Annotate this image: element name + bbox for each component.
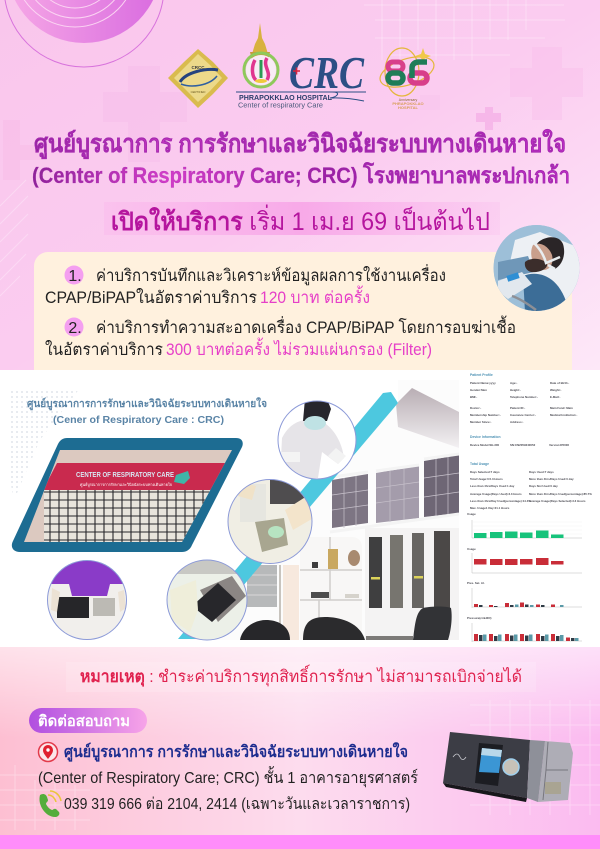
report text: Total Usage xyxy=(470,462,489,466)
collage heading: (Cener of Respiratory Care : CRC) xyxy=(53,415,224,426)
report text: Telephone Number:- xyxy=(510,395,538,399)
chairs xyxy=(303,617,365,640)
logo: 86th anniversary xyxy=(376,48,438,110)
report text: More than 4hrs/Days Used:0 day xyxy=(529,477,574,481)
logo: CRCC gold badge: CERTIFIED xyxy=(191,90,205,94)
contact heading pill: ติดต่อสอบถาม xyxy=(38,712,130,730)
report text: Device Information xyxy=(470,435,501,439)
report text xyxy=(467,373,592,620)
photo: purple gown with device xyxy=(47,560,129,640)
report text: Member Since:- xyxy=(470,420,492,424)
note xyxy=(66,662,536,692)
report text: Medical Institution:- xyxy=(550,413,577,417)
report text: Doctor:- xyxy=(470,406,481,410)
photo: patient with CPAP mask xyxy=(494,225,585,312)
item 1 text: CPAP/BiPAPในอัตราค่าบริการ xyxy=(45,288,257,307)
windows xyxy=(330,454,459,532)
report text: Days Used:7 days xyxy=(529,470,554,474)
report text: Max. Usage1 Day:21.1 Hours xyxy=(470,506,510,510)
photo: hand holding device xyxy=(167,560,247,640)
background medical crosses and grid xyxy=(0,0,583,296)
report text: Patient ID:- xyxy=(510,406,525,410)
logo: CRC wordmark: PHRAPOKKLAO HOSPITAL xyxy=(239,93,332,102)
logo row xyxy=(168,23,438,110)
note: หมายเหตุ : ชำระค่าบริการทุกสิทธิ์การรักษา ไม่สามารถเบิกจ่ายได้ xyxy=(80,664,522,687)
report text: Gender:Men xyxy=(470,388,487,392)
photo: gloved hands cleaning xyxy=(228,480,317,564)
report text: Insurance Carrier:- xyxy=(510,413,536,417)
chart: pressure settings bars xyxy=(472,588,582,608)
report text: Days Not Used:0 day xyxy=(529,484,558,488)
report text: Days Selected:7 days xyxy=(470,470,500,474)
report text: Pressure(cmH2O) xyxy=(467,616,491,620)
opening date banner: เปิดให้บริการ เริ่ม 1 เม.ย 69 เป็นต้นไป xyxy=(111,204,490,236)
contact: center name: ศูนย์บูรณาการ การรักษาและวินิจฉัยระบบทางเดินหายใจ xyxy=(64,742,408,763)
report text: Usage xyxy=(467,512,476,516)
report: CPAP usage data xyxy=(467,373,592,642)
logo: 86th anniversary: HOSPITAL xyxy=(398,105,419,110)
title xyxy=(32,128,570,188)
icon: phone xyxy=(39,791,61,817)
report text: Usage xyxy=(467,547,476,551)
logo: CRCC gold badge: CRCC xyxy=(192,65,205,70)
report text: Device Model:SE-300 xyxy=(470,443,499,447)
item 1 number xyxy=(64,266,84,285)
contact: phone number: 039 319 666 ต่อ 2104, 2414 (เฉพาะวันและเวลาราชการ) xyxy=(64,796,410,813)
logo: CRC wordmark: Center of respiratory Care xyxy=(238,100,323,110)
chart: pressure bars xyxy=(472,623,582,642)
photo: service center storefront: ศูนย์บูรณาการการรักษาและวินิจฉัยระบบทางเดินหายใจ xyxy=(80,482,172,488)
side window xyxy=(247,565,277,607)
contact: address: (Center of Respiratory Care; CRC) ชั้น 1 อาคารอายุรศาสตร์ xyxy=(38,766,418,788)
logo: 86th anniversary: PHRAPOKKLAO xyxy=(392,101,424,106)
logo: hospital royal emblem xyxy=(244,23,278,87)
photo: nurse with device xyxy=(277,399,357,480)
panel: service fees xyxy=(34,252,572,370)
item 2 text: ค่าบริการทำความสะอาดเครื่อง CPAP/BiPAP โดยการอบฆ่าเชื้อ xyxy=(96,315,516,337)
item 2 text xyxy=(45,315,516,359)
report text: Pres. Set. Al. xyxy=(467,581,485,585)
logo: CRCC gold badge xyxy=(168,49,228,108)
report text: Total Usage:0.5.3 Hours xyxy=(470,477,503,481)
icon: location pin xyxy=(38,742,58,762)
item 2 number: 2. xyxy=(68,320,82,337)
collage heading: ศูนย์บูรณาการการรักษาและวินิจฉัยระบบทางเดินหายใจ xyxy=(27,396,267,411)
photo: service center storefront xyxy=(12,438,243,552)
report text: SN:CN2059240052 xyxy=(510,443,536,447)
photo: service center storefront: CENTER OF RESPIRATORY CARE xyxy=(76,472,174,479)
report text: Average Usage(Days Used):3.3 Hours xyxy=(470,492,522,496)
logo: 86th anniversary: Anniversary xyxy=(399,98,417,102)
report text: Less than 4hrs/Days Used:1 day xyxy=(470,484,515,488)
report text: Weight:- xyxy=(550,388,562,392)
cabinet xyxy=(365,528,459,640)
report text: Age:- xyxy=(510,381,517,385)
chart: usage red bars xyxy=(472,553,582,573)
report text: Address:- xyxy=(510,420,524,424)
bottom strip xyxy=(0,835,600,849)
report text: Patient Name:yyyy xyxy=(470,381,496,385)
item 1 number: 1. xyxy=(68,268,82,285)
contact heading pill xyxy=(29,708,147,733)
report text: Patient Profile xyxy=(470,373,493,377)
panel: photo collage xyxy=(0,370,600,647)
report text: Average Usage(Days Selected):3.3 Hours xyxy=(529,499,586,503)
office photo xyxy=(240,388,459,640)
item 2 number xyxy=(64,318,84,337)
report text: Main Fund: Main xyxy=(550,406,573,410)
dotted texture xyxy=(8,388,80,500)
background grid lower xyxy=(0,700,600,830)
photo: CPAP device xyxy=(443,732,573,802)
decorative top-left circle xyxy=(4,0,164,67)
chart: usage green bars xyxy=(472,520,582,538)
report text: Date of Birth:- xyxy=(550,381,569,385)
report text: Membership Number:- xyxy=(470,413,501,417)
logo: CRC wordmark xyxy=(236,47,366,110)
report text: E-Mail:- xyxy=(550,395,560,399)
item 1 text xyxy=(45,264,446,307)
report text: More than 4hrs/Days Used(percentage):85.7% xyxy=(529,492,592,496)
report text: Version:R5006 xyxy=(549,443,569,447)
item 2 text: 300 บาทต่อครั้ง ไม่รวมแผ่นกรอง (Filter) xyxy=(166,337,432,359)
report text: Less than 4hrs/Day Used(percentage):14.3% xyxy=(470,499,531,503)
collage heading xyxy=(27,396,267,426)
teal diagonal band xyxy=(178,392,398,639)
report text: BMI:- xyxy=(470,395,477,399)
report text: Height:- xyxy=(510,388,521,392)
item 1 text: 120 บาท ต่อครั้ง xyxy=(260,285,370,307)
item 2 text: ในอัตราค่าบริการ xyxy=(45,340,163,359)
logo: CRC wordmark: CRC xyxy=(289,47,365,98)
shelves xyxy=(300,537,362,640)
item 1 text: ค่าบริการบันทึกและวิเคราะห์ข้อมูลผลการใช้งานเครื่อง xyxy=(96,264,446,286)
